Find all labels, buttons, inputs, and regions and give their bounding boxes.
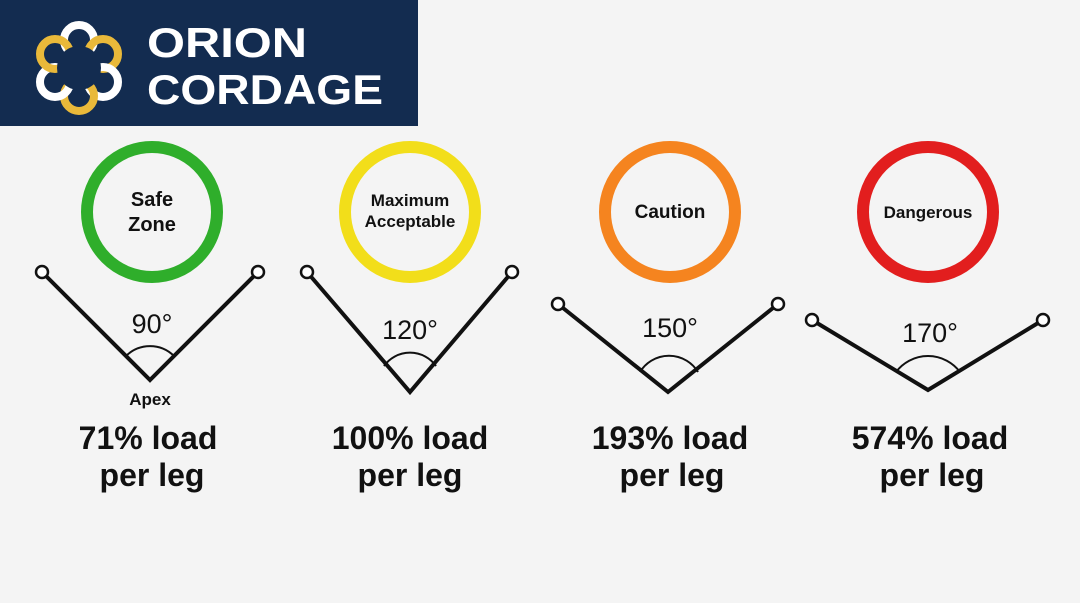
panel: 120 max acceptable [301, 147, 518, 493]
panel: 150 caution: Caution [635, 202, 705, 223]
header: logo banner [0, 0, 418, 126]
panel: 150 caution: 193% load [592, 420, 748, 456]
panel: 120 max acceptable: per leg [358, 457, 462, 493]
panel: 120 max acceptable: Maximum [371, 191, 449, 210]
panel: 170 dangerous: per leg [880, 457, 984, 493]
panel: 90 safe: Zone [128, 214, 176, 236]
panel: 90 safe: 71% load [79, 420, 217, 456]
panel: 90 safe: Apex [129, 390, 171, 409]
panel: 120 max acceptable: 100% load [332, 420, 488, 456]
title: ORION CORDAGE: ORION [147, 19, 307, 66]
panel: 90 safe: 90° [132, 309, 172, 339]
panel: 170 dangerous: 170° [902, 318, 958, 348]
panel: 90 safe: Safe [131, 189, 173, 211]
panel: 120 max acceptable: Acceptable [365, 212, 455, 231]
panel: 150 caution [552, 147, 784, 493]
panel: 170 dangerous [806, 147, 1049, 493]
panel: 170 dangerous: 574% load [852, 420, 1008, 456]
panel: 150 caution: per leg [620, 457, 724, 493]
panel: 170 dangerous: Dangerous [884, 203, 972, 222]
panel: 120 max acceptable: 120° [382, 315, 438, 345]
panel: 90 safe: per leg [100, 457, 204, 493]
panel: 150 caution: 150° [642, 313, 698, 343]
icon: rope knot logo [40, 25, 118, 111]
panel: 90 safe [36, 147, 264, 493]
header: logo banner: CORDAGE [147, 66, 383, 113]
